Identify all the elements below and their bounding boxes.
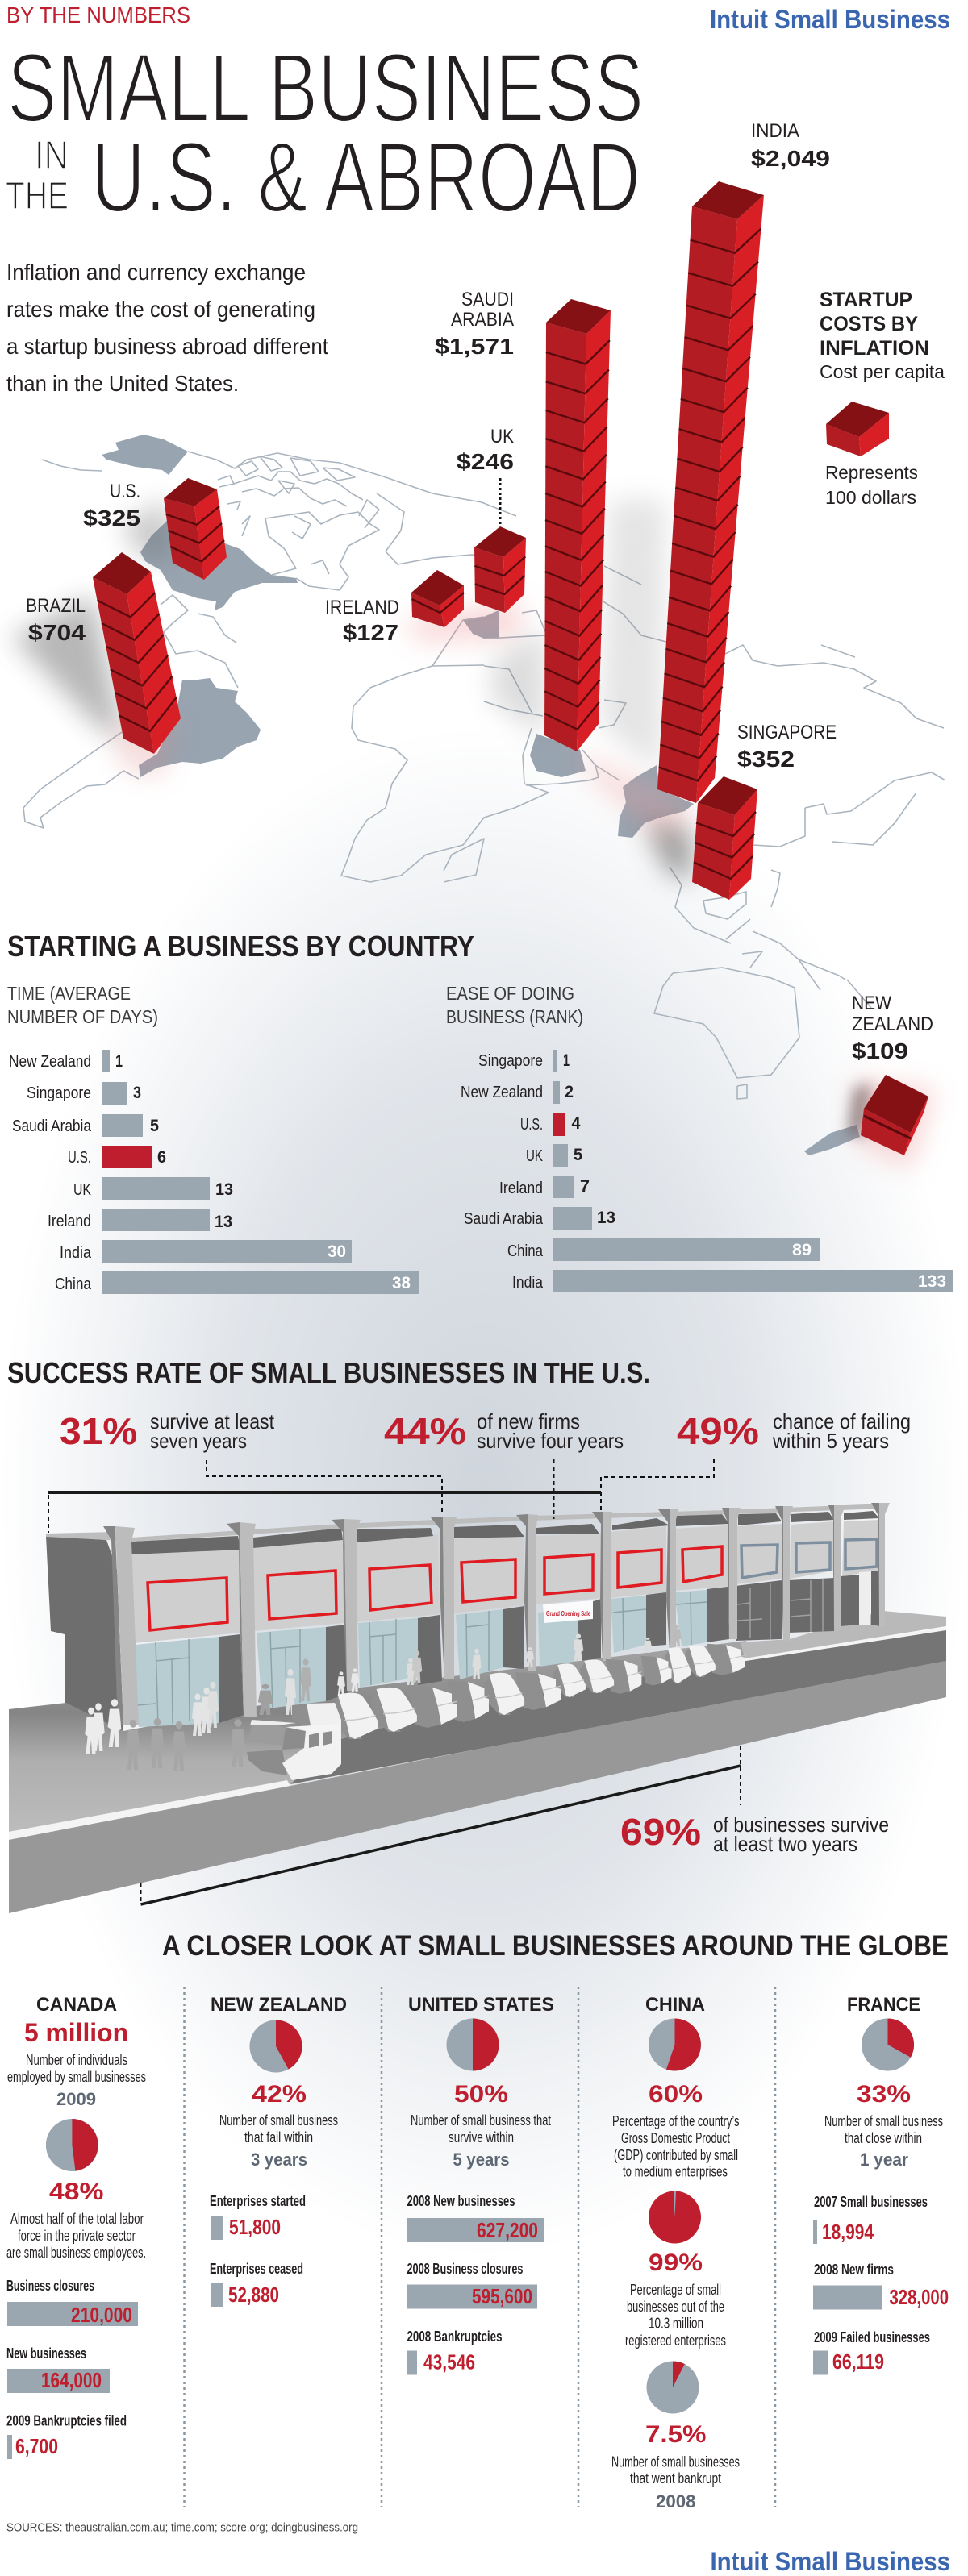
label: Brazil: $704 — [28, 620, 86, 645]
bay 2 — [253, 1528, 348, 1709]
legend: startup costs: 100 dollars — [825, 487, 916, 508]
parapet — [46, 1504, 885, 1542]
heading: success rate: SUCCESS RATE OF SMALL BUSINESSES IN THE U.S. — [7, 1356, 650, 1389]
logo: Intuit Small Business: Intuit Small Business — [710, 5, 950, 34]
panel: France: 66,119 — [832, 2349, 884, 2374]
truck — [292, 1703, 341, 1739]
values: ease: 89 — [792, 1241, 812, 1259]
panel: Canada: Number of individuals — [26, 2052, 127, 2068]
bay 10 vacant — [841, 1511, 881, 1626]
label: UK: $246 — [457, 449, 514, 474]
legend: startup costs: Cost per capita — [820, 361, 945, 382]
labels: time: New Zealand — [9, 1053, 91, 1071]
panel: China — [611, 1994, 740, 2511]
labels: ease: Singapore — [478, 1052, 543, 1070]
panel: China: 99% — [649, 2249, 703, 2276]
stat: 31 percent: survive at least — [150, 1409, 275, 1434]
panel: Canada: 48% — [49, 2179, 103, 2205]
column: Ireland — [411, 570, 464, 627]
labels: time — [9, 1053, 92, 1293]
label: UK — [457, 426, 514, 526]
pie: 50 percent — [447, 2019, 499, 2070]
panel: Canada: New businesses — [6, 2345, 86, 2362]
panel: China: Number of small businesses — [611, 2454, 740, 2470]
values: ease — [563, 1051, 946, 1291]
bar chart: time in days — [7, 983, 419, 1294]
labels: time: UK — [73, 1181, 92, 1199]
person beside jeep — [231, 1719, 245, 1767]
panel: China: that went bankrupt — [630, 2470, 721, 2487]
stat: 69 percent — [620, 1811, 889, 1856]
label: Ireland: $127 — [343, 620, 398, 645]
values: time: 13 — [215, 1213, 232, 1231]
bar chart: time in days: TIME (AVERAGE — [7, 983, 131, 1004]
intro paragraph — [6, 260, 328, 396]
panel: United States: UNITED STATES — [408, 1994, 554, 2016]
label: Ireland — [325, 597, 399, 645]
panel: United States: Number of small business that — [411, 2112, 551, 2129]
values: ease: 2 — [565, 1083, 574, 1101]
label: Singapore: $352 — [737, 747, 795, 772]
stat: 49 percent: 49% — [677, 1410, 759, 1452]
panel: Canada: 2009 Bankruptcies filed — [6, 2412, 127, 2428]
bay 1 — [131, 1536, 244, 1727]
column dividers — [184, 1987, 775, 2507]
intro paragraph: Inflation and currency exchange — [6, 260, 306, 285]
stat: 49 percent: chance of failing — [773, 1409, 911, 1434]
title: IN — [35, 134, 69, 177]
label: New Zealand: ZEALAND — [852, 1013, 933, 1035]
bar chart: ease of doing business — [446, 983, 953, 1292]
stat: 44 percent — [384, 1409, 624, 1453]
labels: time: China — [55, 1276, 92, 1293]
pie: 48 percent — [46, 2119, 98, 2171]
panel: China: (GDP) contributed by small — [614, 2147, 738, 2163]
stat: 31 percent: 31% — [60, 1410, 137, 1452]
labels: ease: Saudi Arabia — [464, 1210, 544, 1228]
panel: New Zealand: Enterprises started — [210, 2193, 306, 2209]
banner — [543, 1600, 593, 1623]
panel: France — [813, 1994, 949, 2375]
label: Brazil — [26, 595, 86, 645]
panel: Canada: 2009 — [56, 2089, 96, 2109]
label: New Zealand — [852, 993, 933, 1063]
panel: United States: 5 years — [453, 2149, 510, 2170]
panel: Canada: employed by small businesses — [7, 2069, 146, 2085]
panel: Canada — [6, 1994, 146, 2459]
values: time: 5 — [150, 1117, 159, 1135]
panel: China: Percentage of small — [630, 2282, 721, 2298]
label: Saudi Arabia: SAUDI — [461, 289, 514, 310]
panel: New Zealand: NEW ZEALAND — [211, 1994, 347, 2016]
panel: Canada: are small business employees. — [6, 2245, 146, 2261]
panel: France: 2008 New firms — [814, 2262, 894, 2278]
label: Brazil: BRAZIL — [26, 595, 86, 617]
legend: startup costs — [820, 289, 945, 508]
panel: New Zealand: 52,880 — [228, 2283, 279, 2307]
column: UK — [474, 526, 526, 613]
labels: ease: New Zealand — [461, 1084, 543, 1101]
column: Saudi Arabia — [544, 299, 611, 751]
panel: France: 328,000 — [889, 2285, 949, 2309]
stat: 44 percent: 44% — [384, 1410, 466, 1452]
car behind jeep — [248, 1720, 296, 1746]
bay 3 — [357, 1528, 442, 1688]
panel: Canada: Business closures — [6, 2278, 94, 2294]
label: Saudi Arabia: $1,571 — [435, 334, 514, 359]
title: SMALL BUSINESS — [7, 32, 644, 142]
stat: 69 percent: at least two years — [713, 1832, 857, 1856]
panel: United States: 2008 Bankruptcies — [407, 2328, 502, 2345]
bay 6 — [610, 1518, 670, 1653]
label: U.S.: U.S. — [110, 481, 140, 502]
panel: New Zealand: Number of small business — [219, 2112, 338, 2129]
pie: 42 percent — [250, 2020, 302, 2072]
label: UK: UK — [490, 426, 514, 447]
panel: United States: 43,546 — [424, 2349, 475, 2374]
labels: time: Singapore — [27, 1084, 91, 1102]
panel: Canada: 6,700 — [15, 2434, 58, 2458]
map: Saudi Arabia fill — [530, 734, 586, 777]
labels: ease: U.S. — [520, 1116, 543, 1134]
panel: New Zealand — [210, 1994, 347, 2307]
bay 4 — [453, 1525, 524, 1679]
label: Singapore — [737, 722, 837, 772]
pillars — [103, 1503, 890, 1725]
panel: New Zealand: that fail within — [244, 2129, 313, 2145]
label: Saudi Arabia: ARABIA — [451, 309, 514, 331]
legend: startup costs: INFLATION — [820, 337, 929, 360]
column shadows — [12, 500, 936, 1169]
panel: Canada: 164,000 — [41, 2368, 102, 2392]
values: ease: 7 — [580, 1177, 590, 1196]
leader lines: bottom — [140, 1746, 741, 1904]
bar chart: time in days: NUMBER OF DAYS) — [7, 1006, 158, 1027]
values: time — [115, 1052, 411, 1292]
panel: China: 2008 — [656, 2491, 695, 2511]
stat: 49 percent — [677, 1409, 911, 1453]
values: time: 13 — [215, 1180, 233, 1199]
stat: 49 percent: within 5 years — [772, 1429, 889, 1453]
left side wall — [46, 1536, 123, 1731]
labels: ease — [461, 1052, 544, 1292]
pie: 99 percent — [649, 2191, 701, 2243]
map: New Zealand island — [804, 1125, 860, 1155]
jeep — [247, 1724, 341, 1780]
label: India: $2,049 — [751, 146, 830, 171]
label: New Zealand: $109 — [852, 1038, 908, 1063]
labels: ease: India — [512, 1274, 544, 1292]
panel: United States: 627,200 — [477, 2218, 538, 2242]
values: time: 3 — [133, 1084, 141, 1102]
panel: China: 10.3 million — [649, 2316, 703, 2332]
panel: United States: 595,600 — [472, 2284, 532, 2308]
bars: time — [102, 1050, 419, 1294]
intro paragraph: a startup business abroad different — [6, 334, 328, 359]
bar chart: ease of doing business: EASE OF DOING — [446, 983, 574, 1004]
bay 8 vacant — [736, 1513, 782, 1641]
column: India — [657, 181, 764, 803]
sidewalk — [9, 1641, 746, 1832]
cars — [231, 1644, 745, 1780]
section label: by the numbers: BY THE NUMBERS — [6, 2, 190, 27]
values: time: 30 — [328, 1242, 346, 1261]
title: U.S. & ABROAD — [91, 123, 640, 234]
stat: 31 percent — [60, 1409, 275, 1453]
panel: United States: 2008 Business closures — [407, 2261, 523, 2277]
label: New Zealand: NEW — [852, 993, 891, 1014]
panel: Canada: 210,000 — [71, 2303, 132, 2327]
stat: 69 percent: 69% — [620, 1811, 701, 1853]
labels: time: U.S. — [68, 1149, 91, 1167]
bars: ease — [553, 1050, 953, 1292]
banner: Grand Opening Sale — [546, 1610, 590, 1617]
panel: United States: survive within — [449, 2129, 514, 2145]
map: United States fill — [102, 435, 298, 610]
panel: United States — [407, 1994, 554, 2375]
label: Ireland: IRELAND — [325, 597, 399, 618]
column: U.S. — [164, 478, 227, 580]
values: ease: 1 — [563, 1051, 570, 1070]
panel: China: registered enterprises — [625, 2333, 726, 2349]
road — [290, 1630, 946, 1784]
intro paragraph: than in the United States. — [6, 371, 239, 396]
label: Singapore: SINGAPORE — [737, 722, 837, 743]
legend: startup costs: Represents — [825, 462, 918, 483]
values: ease: 133 — [918, 1272, 946, 1291]
values: time: 6 — [157, 1148, 166, 1167]
bay 7 — [674, 1514, 729, 1646]
stat: 44 percent: survive four years — [477, 1429, 624, 1453]
icon: legend cube — [826, 402, 889, 456]
label: Saudi Arabia — [435, 289, 514, 359]
panel: France: 1 year — [860, 2149, 908, 2170]
title: THE — [6, 175, 69, 218]
label: U.S.: $325 — [83, 506, 140, 531]
panel: New Zealand: 3 years — [251, 2149, 307, 2170]
panel: New Zealand: 51,800 — [229, 2215, 281, 2239]
label: India — [751, 120, 830, 171]
panel: New Zealand: Enterprises ceased — [210, 2261, 303, 2277]
panel: China: Gross Domestic Product — [621, 2130, 730, 2146]
panel: United States: 50% — [454, 2081, 508, 2108]
labels: ease: Ireland — [499, 1180, 543, 1197]
road front — [9, 1661, 946, 1913]
panel: China: to medium enterprises — [623, 2164, 728, 2180]
label: India: INDIA — [751, 120, 799, 142]
panel: China: 60% — [649, 2081, 703, 2108]
map: Brazil fill — [139, 678, 261, 777]
labels: ease: UK — [526, 1147, 543, 1165]
column: New Zealand — [861, 1075, 928, 1155]
pie: 60 percent — [649, 2019, 701, 2070]
stat: 31 percent: seven years — [150, 1429, 247, 1453]
labels: time: Saudi Arabia — [12, 1117, 92, 1135]
column: Brazil — [93, 552, 181, 754]
panel: Canada: 5 million — [24, 2018, 128, 2047]
label: U.S. — [83, 481, 140, 531]
curb — [9, 1780, 290, 1840]
values: ease: 4 — [571, 1114, 581, 1133]
labels: time: Ireland — [48, 1213, 91, 1230]
legend: startup costs: STARTUP — [820, 289, 912, 311]
sources: SOURCES: theaustralian.com.au; time.com; score.org; doingbusiness.org — [6, 2522, 358, 2535]
column: Singapore — [692, 776, 757, 900]
bar chart: ease of doing business: BUSINESS (RANK) — [446, 1006, 583, 1027]
panel: France: 2007 Small businesses — [814, 2194, 928, 2210]
panel: China: businesses out of the — [627, 2299, 724, 2315]
legend: startup costs: COSTS BY — [820, 313, 918, 335]
panel: China: 7.5% — [645, 2421, 707, 2448]
panel: France: that close within — [845, 2130, 922, 2146]
logo: footer: Intuit Small Business — [710, 2547, 950, 2576]
intro paragraph: rates make the cost of generating — [6, 297, 315, 322]
heading: starting a business by country: STARTING A BUSINESS BY COUNTRY — [7, 930, 474, 963]
people — [85, 1625, 682, 1771]
illustration: storefront street — [9, 1503, 946, 1913]
stat: 69 percent: of businesses survive — [713, 1812, 889, 1837]
world map — [23, 435, 945, 1155]
panel: France: 33% — [857, 2081, 911, 2108]
panel: China: CHINA — [645, 1994, 705, 2016]
panel: France: 18,994 — [822, 2220, 874, 2244]
map: India fill — [618, 765, 694, 838]
labels: time: India — [60, 1244, 92, 1262]
values: time: 38 — [392, 1274, 411, 1292]
values: ease: 13 — [597, 1209, 615, 1227]
panel: France: FRANCE — [847, 1994, 920, 2016]
values: time: 1 — [115, 1052, 123, 1071]
panel: Canada: CANADA — [36, 1994, 117, 2016]
title — [6, 32, 644, 234]
map: coastlines — [23, 452, 945, 1099]
bay 9 vacant — [788, 1512, 834, 1633]
bay 5 with banner — [536, 1524, 601, 1667]
map: UK fill — [463, 610, 499, 639]
facade bays — [131, 1511, 881, 1727]
leader lines: top — [48, 1459, 714, 1533]
stat: 44 percent: of new firms — [477, 1409, 580, 1434]
panel: Canada: force in the private sector — [18, 2228, 136, 2244]
labels: ease: China — [507, 1242, 544, 1260]
pie: 33 percent — [862, 2018, 914, 2070]
panel: Canada: Almost half of the total labor — [10, 2211, 144, 2227]
panel: New Zealand: 42% — [252, 2081, 307, 2108]
panel: China: Percentage of the country’s — [612, 2113, 739, 2129]
values: ease: 5 — [574, 1146, 582, 1164]
pie: 7.5 percent — [647, 2361, 699, 2414]
panel: United States: 2008 New businesses — [407, 2193, 515, 2209]
